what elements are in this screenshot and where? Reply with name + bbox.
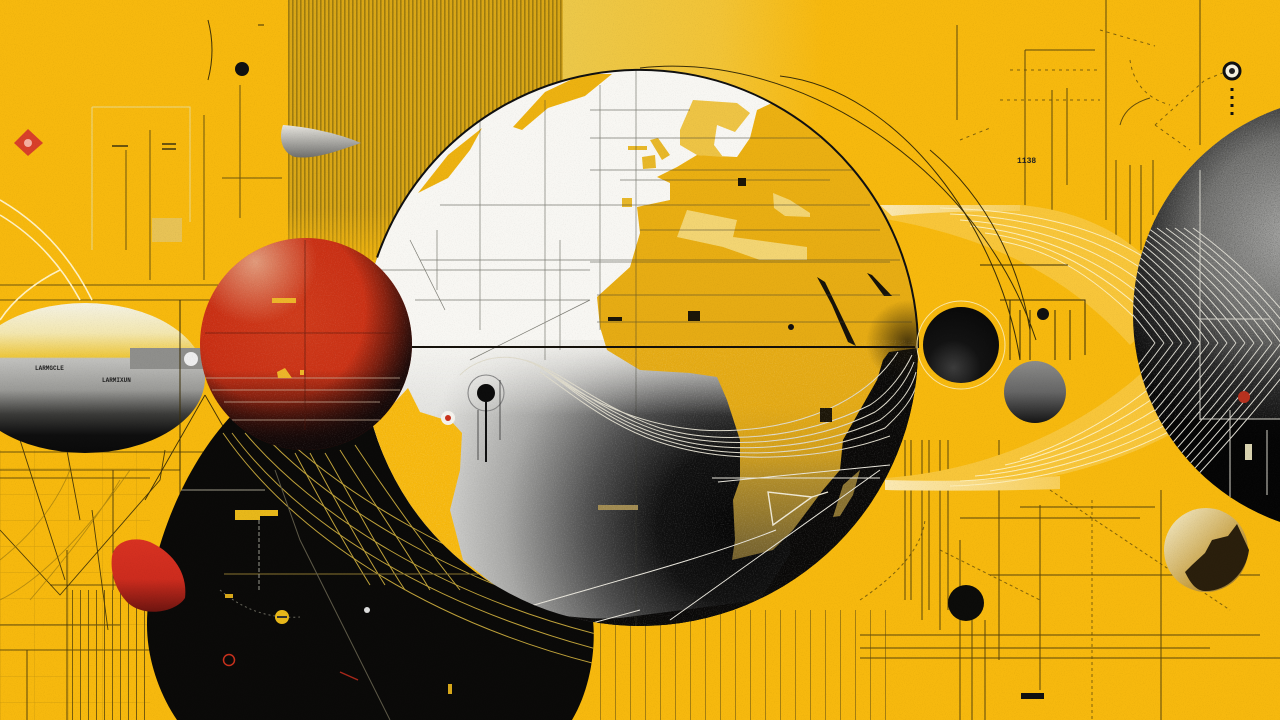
icon: red diamond bbox=[14, 129, 43, 156]
land: Red Sea crack bbox=[817, 277, 856, 346]
icon: top black dot bbox=[235, 62, 249, 76]
South Africa wedge marker bbox=[768, 492, 828, 525]
land: Arabian gulf bbox=[867, 273, 892, 296]
equator line bbox=[412, 346, 915, 348]
lower black dot bbox=[948, 585, 984, 621]
disc details bbox=[224, 510, 452, 694]
left sphere label strip bbox=[130, 348, 217, 369]
red blob bbox=[112, 539, 185, 612]
upper left technical lines bbox=[0, 20, 290, 450]
globe bbox=[373, 68, 919, 626]
globe grain bbox=[360, 340, 920, 630]
land: darkened limb bbox=[868, 302, 918, 370]
swirl lines bbox=[460, 352, 917, 457]
lower left drafting lines bbox=[0, 395, 228, 720]
chevron contour lines bbox=[1133, 228, 1280, 473]
land: Canada bbox=[418, 128, 482, 193]
land: Africa and Eurasia bbox=[597, 90, 940, 560]
top pale fan bbox=[880, 205, 1180, 345]
left sphere eye icon bbox=[184, 352, 198, 366]
black sphere bbox=[917, 301, 1005, 389]
small map marks bbox=[608, 178, 832, 422]
land: South America bbox=[373, 388, 493, 584]
orbit arcs bbox=[640, 66, 1085, 360]
striped panel: top bbox=[288, 0, 563, 260]
land: pale Sahara patches bbox=[677, 193, 810, 260]
land: British Isles bbox=[622, 138, 670, 207]
red sphere bbox=[200, 238, 412, 450]
grey sphere bbox=[1004, 361, 1066, 423]
sphere rules and marks bbox=[1200, 170, 1280, 505]
land: Madagascar bbox=[833, 470, 860, 517]
large right sphere bbox=[1133, 108, 1280, 522]
small dot on wires bbox=[1037, 308, 1049, 320]
black disc: lower left bbox=[147, 415, 600, 720]
globe: black lower edge bbox=[567, 358, 918, 626]
left sphere small text two: LARMIXUN bbox=[102, 377, 131, 384]
target marker on globe bbox=[441, 375, 504, 462]
lower right technical lines bbox=[860, 440, 1280, 720]
white rays bbox=[533, 464, 890, 622]
land: Greenland bbox=[513, 74, 612, 130]
icon: ring target bbox=[1224, 63, 1240, 116]
speckled panel: top centre bbox=[562, 0, 822, 120]
cone bbox=[281, 125, 361, 158]
left sphere small text: LARMGCLE bbox=[35, 365, 64, 372]
globe: grey ocean bbox=[360, 340, 790, 630]
central Africa dot bbox=[788, 324, 794, 330]
globe grid lines bbox=[380, 68, 912, 630]
left sphere bbox=[0, 303, 217, 453]
vertical line through left sphere bbox=[179, 300, 181, 470]
code label: top right: 1138 bbox=[1017, 157, 1036, 166]
lower middle hatching bbox=[600, 610, 900, 720]
smudge bbox=[598, 505, 638, 510]
bottom pale fan bbox=[885, 370, 1195, 491]
land: Scandinavia bbox=[680, 100, 750, 157]
globe: white ocean bbox=[360, 60, 790, 450]
mini globe bbox=[1164, 508, 1249, 592]
upper right technical lines bbox=[957, 0, 1225, 260]
